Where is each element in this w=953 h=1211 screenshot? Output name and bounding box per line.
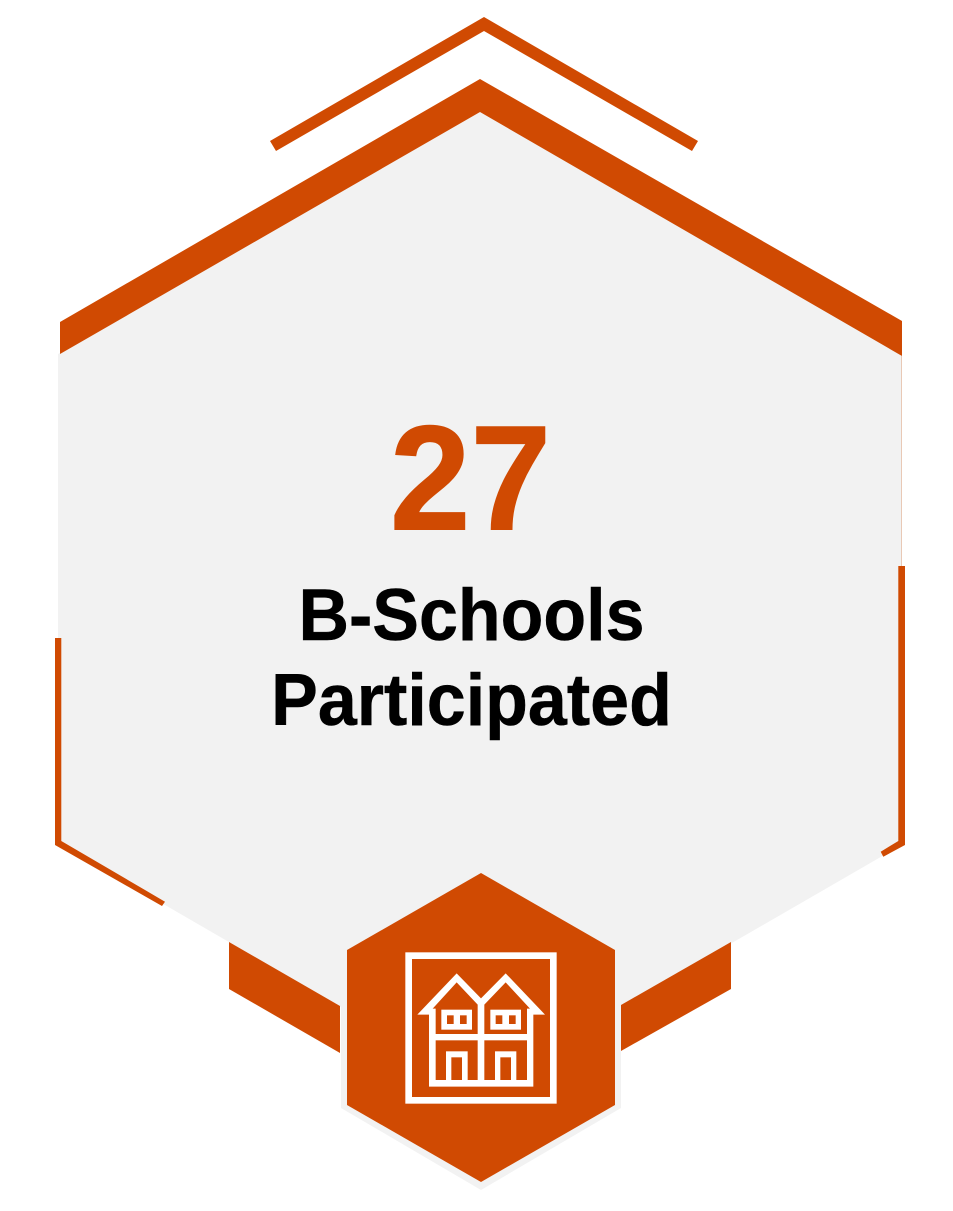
label: [271, 574, 672, 741]
big number: 27: [390, 396, 551, 562]
panel: main hexagon: [58, 111, 902, 1088]
lower right band: [621, 942, 731, 1051]
top chevron accent: [270, 17, 698, 151]
right edge hairline: [901, 356, 902, 566]
label: B-Schools: [298, 574, 645, 656]
icon badge: [341, 866, 621, 1190]
left bracket accent: [55, 638, 165, 906]
top hexagon band: [60, 79, 902, 356]
right bracket accent: [881, 566, 905, 857]
icon: houses in a square: [409, 956, 553, 1100]
label: Participated: [271, 659, 672, 741]
badge outline: [341, 866, 621, 1190]
lower left band: [229, 942, 340, 1053]
badge hexagon: [347, 873, 615, 1182]
